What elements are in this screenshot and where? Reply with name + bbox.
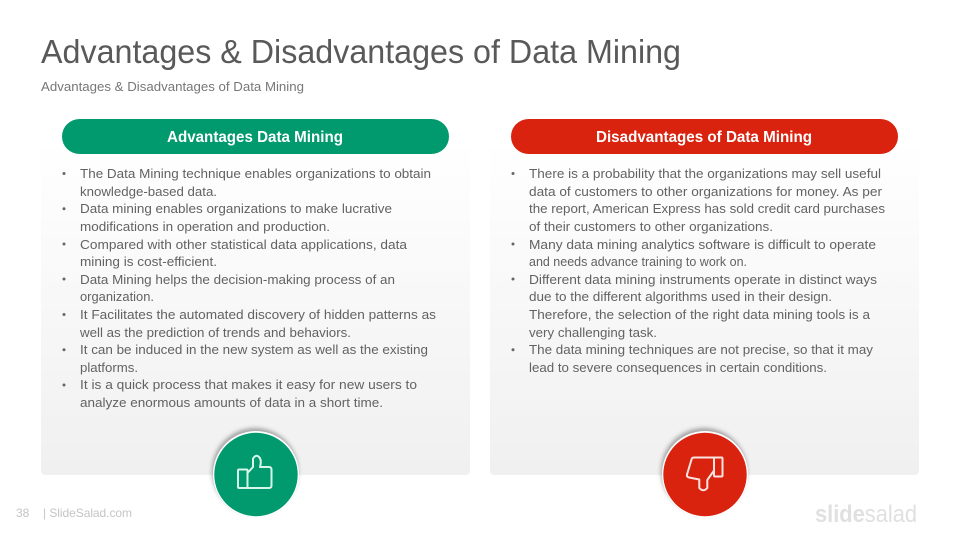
text block: disadvantages list: due to the different algorithms used in their design. xyxy=(529,289,832,304)
footer: site name: | SlideSalad.com xyxy=(43,506,132,520)
title: Advantages & Disadvantages of Data Mining xyxy=(41,33,681,70)
subtitle: Advantages & Disadvantages of Data Mining xyxy=(41,79,304,94)
text block: advantages list: Data Mining helps the decision-making process of an xyxy=(80,272,395,287)
header pill: disadvantages xyxy=(511,119,898,154)
footer: page number: 38 xyxy=(16,506,30,520)
text block: advantages list: Data mining enables organizations to make lucrative xyxy=(80,201,392,216)
text block: disadvantages list: There is a probability that the organizations may sell useful xyxy=(529,166,881,181)
text block: disadvantages list: and needs advance training to work on. xyxy=(529,254,747,269)
text block: disadvantages list: data of customers to other organizations for money. As per xyxy=(529,184,883,199)
text block: advantages list xyxy=(62,166,437,410)
text block: advantages list: platforms. xyxy=(80,360,138,375)
panel: advantages xyxy=(41,119,470,517)
text block: disadvantages list: Different data mining instruments operate in distinct ways xyxy=(529,272,878,287)
text block: advantages list: analyze enormous amounts of data in a short time. xyxy=(80,395,383,410)
text block: advantages list: mining is cost-efficient. xyxy=(80,254,217,269)
text block: disadvantages list: Many data mining analytics software is difficult to operate xyxy=(529,237,876,252)
text block: disadvantages list: lead to severe consequences in certain conditions. xyxy=(529,360,827,375)
header pill: advantages: Advantages Data Mining xyxy=(167,129,343,146)
text block: advantages list: It Facilitates the automated discovery of hidden patterns as xyxy=(80,307,437,322)
text block: advantages list: organization. xyxy=(80,289,154,304)
text block: advantages list: knowledge-based data. xyxy=(80,184,217,199)
text block: advantages list: well as the prediction of trends and behaviors. xyxy=(79,325,351,340)
text block: disadvantages list: Therefore, the selection of the right data mining tools is a xyxy=(529,307,871,322)
panel background: advantages xyxy=(41,140,470,475)
header pill: disadvantages: Disadvantages of Data Mining xyxy=(596,129,812,146)
text block: disadvantages list: of their customers to other organizations. xyxy=(529,219,773,234)
text block: advantages list: The Data Mining technique enables organizations to obtain xyxy=(80,166,431,181)
text block: disadvantages list: very challenging task. xyxy=(529,325,657,340)
panel: disadvantages xyxy=(490,119,919,517)
text block: advantages list: It is a quick process that makes it easy for new users to xyxy=(80,377,417,392)
text block: advantages list: Compared with other statistical data applications, data xyxy=(80,237,408,252)
panel background: disadvantages xyxy=(490,140,919,475)
logo: slidesalad: slidesalad xyxy=(815,501,917,528)
text block: advantages list: It can be induced in the new system as well as the existing xyxy=(80,342,428,357)
icon: thumbs up badge xyxy=(212,428,299,517)
header pill: advantages xyxy=(62,119,449,154)
text block: disadvantages list: The data mining techniques are not precise, so that it may xyxy=(529,342,874,357)
text block: disadvantages list xyxy=(512,166,886,375)
text block: advantages list: modifications in operation and production. xyxy=(80,219,330,234)
icon: thumbs down badge xyxy=(661,428,748,517)
text block: disadvantages list: the report, American Express has sold credit card purchases xyxy=(529,201,886,216)
